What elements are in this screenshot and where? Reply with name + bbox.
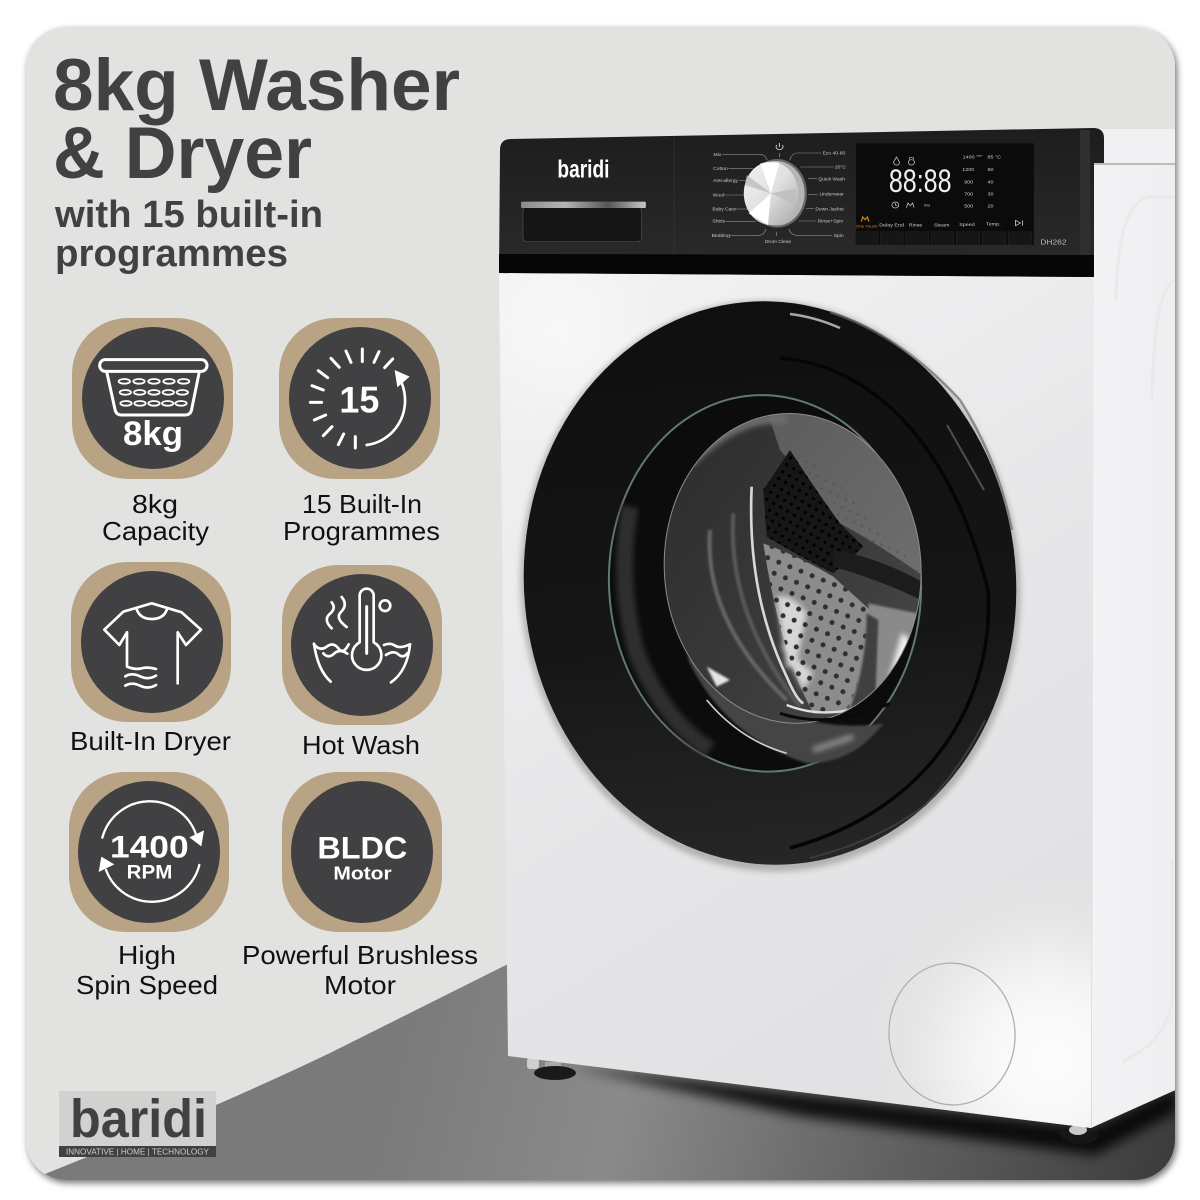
dark strip (834, 550, 920, 598)
button labels: Speed (959, 222, 975, 228)
caption: Programmes (283, 516, 440, 546)
door glass (599, 387, 933, 780)
display values: rpm (976, 154, 983, 158)
program labels: Underwear (820, 192, 844, 197)
digits: 88:88 (889, 163, 952, 199)
control panel (499, 128, 1104, 277)
side panel (1091, 164, 1180, 1128)
lower rim reflection (687, 657, 883, 763)
display values: 20 (988, 204, 994, 210)
door groove (780, 358, 989, 848)
left swirls (710, 530, 787, 700)
washing machine (496, 128, 1180, 1170)
feature: 8kg capacity (72, 318, 233, 546)
display values (924, 154, 1001, 210)
button labels: Delay End (879, 223, 904, 228)
display values: 1200 (962, 167, 974, 173)
rim highlights (830, 312, 1012, 530)
program labels: Baby Care (712, 207, 736, 212)
title (53, 45, 460, 275)
feature: hot wash (282, 565, 442, 760)
program labels: Eco 40-60 (823, 151, 846, 155)
service hatch (888, 962, 1016, 1106)
display (855, 143, 1034, 245)
caption: Spin Speed (76, 970, 218, 1000)
one touch (856, 217, 878, 228)
lower drum (763, 543, 871, 713)
door outer ring (517, 298, 1024, 874)
caption (102, 489, 209, 546)
caption: 15 Built-In (302, 489, 422, 519)
top surface (1094, 129, 1180, 164)
program labels: Anti-allergy (713, 178, 739, 183)
program labels: 20°C (835, 165, 847, 170)
buttons (855, 232, 1032, 245)
caption (242, 940, 478, 1000)
icon: power (776, 143, 783, 150)
title: 8kg Washer (53, 45, 460, 126)
button labels: Temp. (986, 222, 1001, 228)
icon: dial with arrow (310, 349, 410, 448)
upper perforation (763, 450, 863, 573)
feature: high spin speed (69, 772, 229, 1000)
one touch: One Touch (856, 224, 878, 228)
right lower wall (847, 602, 916, 709)
control knob (744, 159, 807, 228)
feature: 15 programmes (279, 318, 440, 546)
caption: High (118, 940, 176, 970)
icon: 1400 rpm (99, 801, 204, 902)
caption: 8kg (132, 489, 178, 519)
icon: bldc text: Motor (333, 862, 392, 883)
icon: laundry basket (100, 360, 207, 415)
icon: bldc text (317, 830, 407, 883)
program labels: Quick Wash (818, 177, 845, 181)
program labels: Mix (714, 152, 722, 157)
display values: Ims (924, 204, 930, 208)
icon: bldc text: BLDC (317, 830, 407, 865)
brand logo: INNOVATIVE | HOME | TECHNOLOGY (66, 1146, 209, 1156)
program labels: Rinse+Spin (818, 219, 844, 223)
display values: 500 (964, 204, 973, 210)
subtitle (54, 194, 323, 275)
subtitle: programmes (55, 233, 288, 275)
glass bowl (664, 413, 922, 724)
icon: thermometer in water (314, 589, 410, 682)
caption (283, 489, 440, 546)
upper reflection (769, 414, 921, 574)
program labels: Down Jacket (815, 207, 845, 211)
caption (76, 940, 218, 1000)
program labels (674, 138, 847, 254)
display values: 1400 (963, 155, 975, 161)
icon: 1400 rpm: 1400 (110, 830, 189, 865)
floor (40, 963, 1180, 1185)
detergent drawer (521, 202, 646, 242)
caption: Hot Wash (302, 730, 420, 760)
caption: Capacity (102, 516, 209, 546)
display values: 700 (964, 192, 973, 197)
display values: 900 (964, 180, 973, 185)
feature: built-in dryer (70, 562, 231, 756)
caption: Built-In Dryer (70, 726, 231, 756)
bowl bottom highlight (786, 704, 849, 714)
front panel (499, 273, 1094, 1128)
program labels: Drum Clean (765, 239, 792, 244)
feature: bldc motor (242, 772, 478, 1000)
display values: 40 (988, 180, 994, 185)
program labels: Spin (834, 233, 844, 238)
display icons (892, 157, 914, 208)
caption: Motor (324, 970, 396, 1000)
button labels (879, 220, 1022, 228)
panel details (521, 138, 1067, 254)
left glass rim (625, 507, 710, 750)
display values: 30 (988, 192, 994, 197)
foot right (1060, 1126, 1098, 1144)
display values: 85 °C (988, 155, 1001, 161)
badge text: 8kg (123, 415, 183, 453)
caption: Powerful Brushless (242, 940, 478, 970)
button labels: Steam (934, 223, 949, 228)
bowl bottom shadow line (780, 703, 890, 720)
display values: 60 (988, 167, 994, 173)
brand logo: baridi (70, 1089, 207, 1149)
program labels: Cotton (713, 166, 728, 171)
foot left (527, 1058, 576, 1080)
program labels: Bedding (712, 233, 730, 238)
panel logo: baridi (557, 154, 609, 183)
subtitle: with 15 built-in (54, 194, 323, 236)
icon: t-shirt (104, 603, 201, 688)
button labels: Rinse (909, 223, 923, 228)
program labels: Wool (713, 193, 724, 197)
glass outer (599, 387, 931, 780)
icon: dial with arrow: 15 (339, 379, 379, 421)
floor shadow under machine (570, 1066, 1176, 1155)
program labels: Shirts (712, 219, 726, 224)
model number: DH262 (1040, 238, 1067, 246)
icon: 1400 rpm: RPM (127, 862, 172, 883)
title: & Dryer (53, 113, 312, 194)
